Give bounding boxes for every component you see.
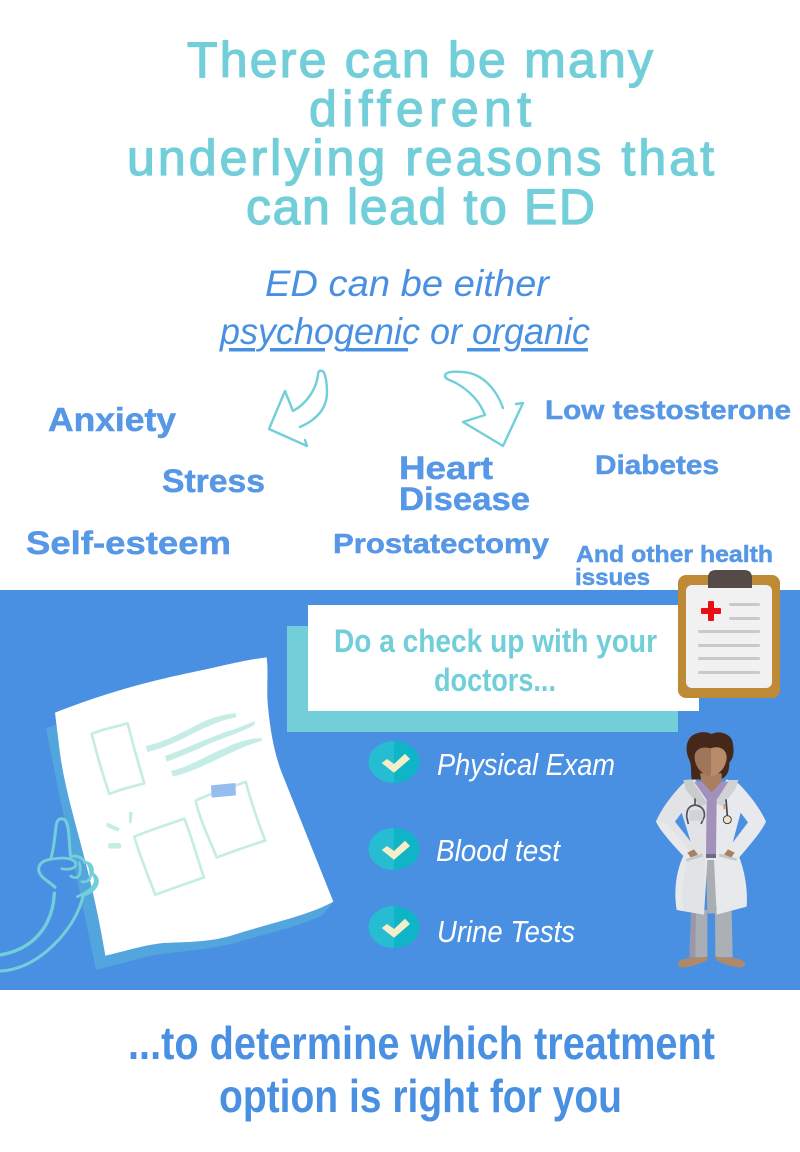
organic causes list: issues [575,564,650,590]
closing statement: option is right for you [219,1070,622,1122]
arrow: left to psychogenic causes [269,371,327,446]
closing statement: ...to determine which treatment [128,1017,715,1069]
organic causes list: Low testosterone [545,395,791,425]
panel: check up [0,590,800,990]
check item: blood test [368,828,561,870]
organic causes list [333,395,791,590]
organic causes list: Heart [399,450,493,486]
check item: blood test: Blood test [436,833,561,868]
check item: urine tests: Urine Tests [437,914,575,949]
shoes [678,957,707,967]
subheading: psychogenic or organic [219,263,590,352]
shirt [694,782,728,855]
stethoscope [687,798,704,824]
callout: do a check up [287,605,699,732]
psychogenic causes list [26,401,265,561]
hair [687,732,734,779]
icon: clipboard [678,570,780,698]
arrow: right to organic causes [445,372,523,446]
callout: do a check up: Do a check up with your [334,623,657,659]
illustration: paper sheet [46,657,333,970]
arm gaps [675,813,691,842]
checklist [368,741,615,949]
organic causes list: And other health [576,541,773,567]
organic causes list: Diabetes [595,450,719,480]
title: There can be many [187,32,653,88]
neck [700,773,722,792]
psychogenic causes list: Anxiety [48,401,177,438]
face [695,747,711,777]
check item: physical exam: Physical Exam [437,747,615,782]
title: different [309,81,531,137]
check item: physical exam [368,741,615,783]
closing statement [128,1017,715,1122]
lab coat [656,779,766,915]
organic causes list: Prostatectomy [333,528,549,559]
subheading: psychogenic or organic: psychogenic or organic [219,311,590,352]
title: underlying reasons that [127,130,714,186]
pockets [689,810,703,821]
psychogenic causes list: Self-esteem [26,525,231,561]
subheading: psychogenic or organic: ED can be either [265,263,551,304]
title [127,32,714,235]
legs [689,910,707,957]
check item: urine tests [368,906,575,949]
title: can lead to ED [246,179,595,235]
hands [687,849,698,857]
callout: do a check up: doctors... [434,662,556,698]
organic causes list: Disease [399,481,530,517]
illustration: hand holding paper [0,819,97,971]
illustration: doctor [656,732,766,967]
psychogenic causes list: Stress [162,463,265,499]
